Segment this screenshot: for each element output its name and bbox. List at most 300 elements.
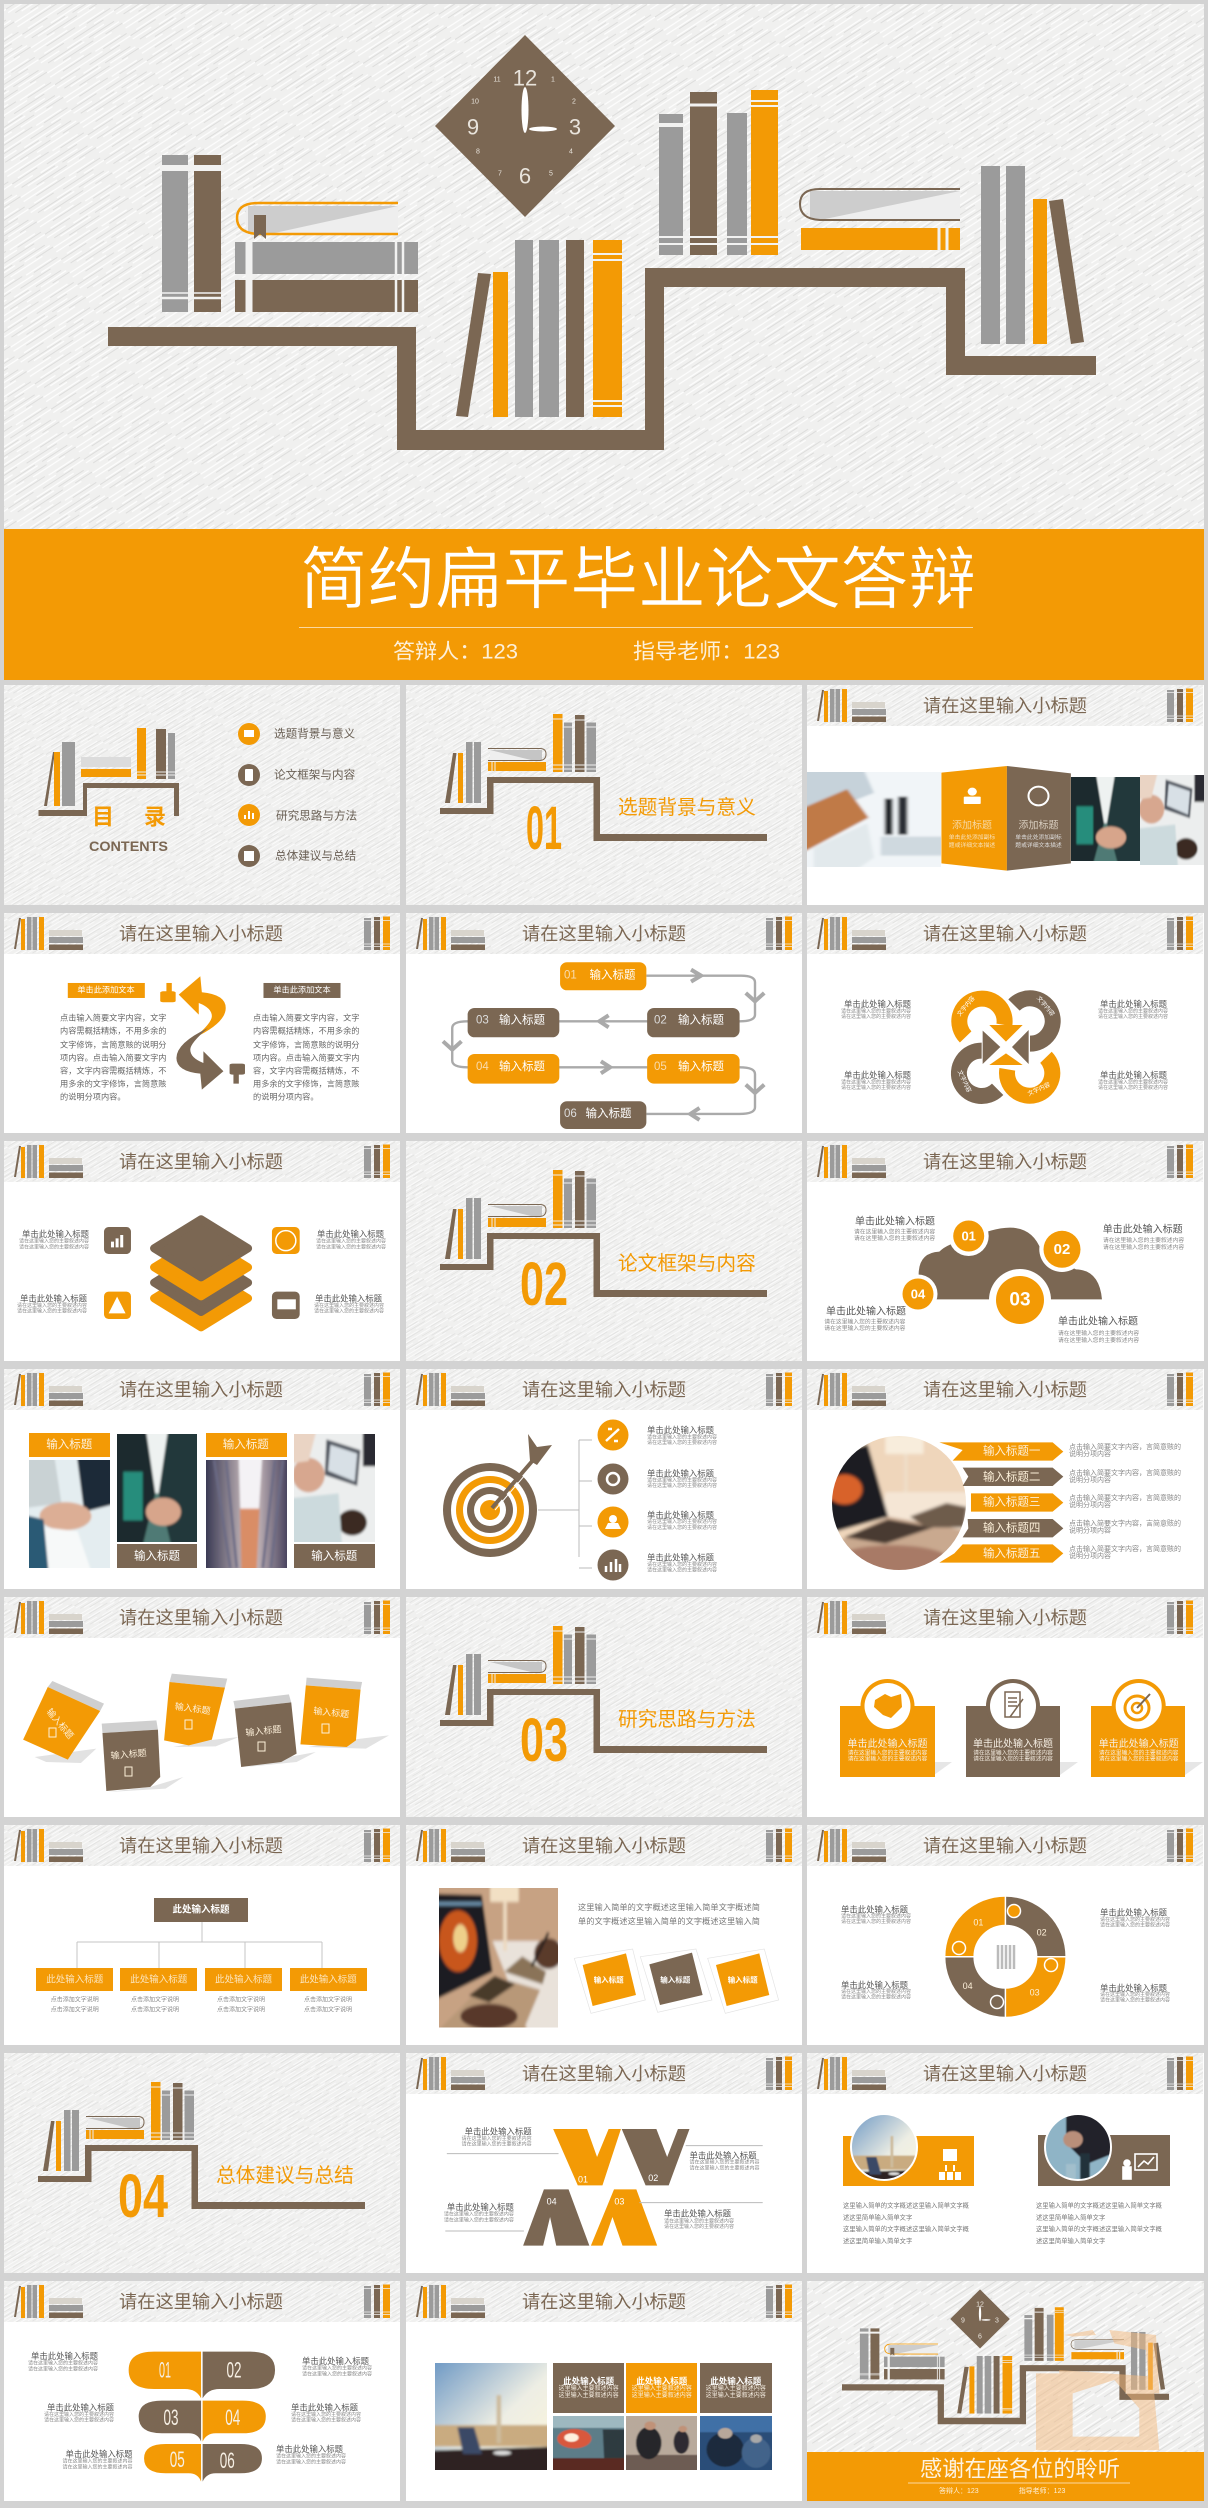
note shapes [23,1674,389,1792]
left photo [794,762,954,876]
text block B: 请在这里输入您的主要叙述内容 [690,2159,760,2166]
section number: 03 [520,1706,568,1774]
text block bottom right: 请在这里输入您的主要叙述内容 [1100,1997,1170,2004]
text block 01: 请在这里输入您的主要叙述内容 [854,1234,935,1242]
panel labels: 单击此处添加副标 [949,833,995,841]
text block R3 [276,2444,346,2465]
panel: flow slide [406,913,802,1133]
contents items: 总体建议与总结 [275,848,356,862]
slide title: 请在这里输入小标题 [522,2292,686,2312]
text block L3: 请在这里输入您的主要叙述内容 [62,2457,132,2464]
text block R1: 请在这里输入您的主要叙述内容 [302,2370,372,2377]
shelf icon [440,714,767,841]
column 3 [198,1433,295,1579]
text block L2: 单击此处输入标题 [47,2403,115,2413]
arrows and thumbs [68,976,341,1090]
note labels: 输入标题 [110,1747,147,1761]
bubbles [129,2352,275,2482]
flow labels: 输入标题 [499,1012,545,1026]
text block B: 请在这里输入您的主要叙述内容 [690,2164,760,2171]
panel: org chart slide [4,1825,400,2045]
clock numerals: 1 [551,76,555,84]
left paragraph: 文字修饰，言简意赅的说明分 [60,1040,166,1050]
slide title: 请在这里输入小标题 [923,1380,1087,1400]
tilted cards [574,1949,779,2013]
text block R2: 请在这里输入您的主要叙述内容 [291,2411,361,2418]
slide title: 请在这里输入小标题 [522,1836,686,1856]
text block C: 单击此处输入标题 [447,2202,515,2212]
text block top left [19,1229,90,1250]
presenter: 答辩人：123 [939,2486,979,2495]
text block top right: 请在这里输入您的主要叙述内容 [1098,1013,1168,1020]
slide title: 请在这里输入小标题 [119,1380,283,1400]
text block R2: 请在这里输入您的主要叙述内容 [291,2417,361,2424]
slide title: 请在这里输入小标题 [923,1836,1087,1856]
box 1: 此处输入标题 [563,2376,615,2386]
mini shelf illustration [842,2289,1169,2424]
clock numerals: 8 [476,148,480,156]
text block D: 单击此处输入标题 [664,2209,732,2219]
text block L1: 请在这里输入您的主要叙述内容 [28,2359,98,2366]
panel: photo grid slide [406,2281,802,2501]
column 3: 输入标题 [223,1437,269,1451]
text block R1 [302,2356,372,2377]
panel labels: 单击此处添加副标 [1015,833,1062,841]
text block bottom right [1100,1983,1170,2004]
text block 3 [647,1510,717,1531]
column 4 [286,1423,383,1568]
left paragraph: 的说明分项内容。 [60,1092,126,1102]
clock numerals: 2 [572,98,576,106]
text block R3: 请在这里输入您的主要叙述内容 [276,2458,346,2465]
header band [4,1369,400,1410]
right paragraph: 的说明分项内容。 [253,1092,319,1102]
text block L3 [62,2449,133,2470]
description text: 单的文字概述这里输入简单的文字概述这里输入简 [578,1916,760,1926]
note labels [45,1700,350,1761]
right paragraph: 内容需概括精炼，不用多余的 [253,1026,359,1036]
text block A: 单击此处输入标题 [465,2126,532,2136]
panel: section 01 [406,685,802,905]
text block L1: 单击此处输入标题 [31,2351,99,2361]
section number: 02 [520,1250,568,1318]
connector lines [538,1440,592,1568]
text block L1 [28,2351,99,2372]
descriptions: 点击输入简要文字内容，言简意赅的 [1069,1442,1181,1451]
right photo a [1064,769,1147,869]
tab labels: 输入标题五 [983,1546,1040,1560]
header band [4,1825,400,1866]
suit photo circle [1046,2115,1110,2179]
flow labels: 输入标题 [678,1059,724,1073]
text block A: 请在这里输入您的主要叙述内容 [462,2135,532,2142]
card 2 [966,1679,1078,1777]
text block C [444,2202,515,2223]
left paragraph: 述这里简单输入简单文字 [843,2236,912,2245]
small photo 3 [693,2411,779,2475]
text block bottom right: 请在这里输入您的主要叙述内容 [314,1308,384,1315]
text block top left: 单击此处输入标题 [22,1229,90,1239]
text block top right: 单击此处输入标题 [1100,1908,1168,1918]
text block L3: 单击此处输入标题 [66,2449,133,2459]
descriptions: 点击输入简要文字内容，言简意赅的 [1069,1518,1181,1528]
right paragraph: 用多余的文字修饰，言简意赅 [253,1078,359,1088]
photo [427,1874,570,2041]
numbered circles: 04 [911,1286,926,1302]
box 3: 此处输入标题 [710,2376,762,2386]
ribbon numbers: 02 [648,2173,658,2183]
text block 01 [854,1214,935,1242]
segment numbers [963,1917,1047,1998]
text block top left: 请在这里输入您的主要叙述内容 [841,1013,911,1020]
panel: photo with tilted cards slide [406,1825,802,2045]
text block top right: 请在这里输入您的主要叙述内容 [316,1238,386,1245]
tab labels: 输入标题二 [983,1469,1040,1483]
left paragraph: 内容需概括精炼，不用多余的 [60,1026,166,1036]
panel: speech bubble pairs slide [4,2281,400,2501]
box labels: 此处输入标题 [215,1974,272,1986]
text block D: 请在这里输入您的主要叙述内容 [664,2223,734,2230]
title underline [299,627,973,628]
bubble numbers: 02 [226,2358,242,2382]
box 1 [553,2363,624,2413]
card labels: 输入标题 [728,1974,758,1984]
text block C: 请在这里输入您的主要叙述内容 [444,2210,514,2217]
text block 02: 请在这里输入您的主要叙述内容 [1103,1236,1184,1244]
target with arrow [443,1434,552,1557]
text block top right [1098,999,1168,1020]
numbered circles: 02 [1054,1241,1070,1258]
left paragraph: 这里输入简单的文字概述这里输入简单文字概 [843,2200,970,2210]
clock numerals: 4 [569,148,573,156]
main title: 简约扁平毕业论文答辩 [300,542,976,618]
card 3 [1091,1679,1203,1777]
text block top left: 单击此处输入标题 [841,1904,909,1914]
segment numbers: 04 [963,1981,973,1991]
slide title: 请在这里输入小标题 [923,1608,1087,1628]
clock numerals: 10 [471,98,479,106]
text block C: 请在这里输入您的主要叙述内容 [444,2216,514,2223]
text block 2: 单击此处输入标题 [647,1468,715,1478]
descriptions: 点击输入简要文字内容，言简意赅的 [1069,1493,1181,1502]
section number: 01 [526,794,562,862]
text block bottom left [17,1293,88,1315]
panel: two circle photos slide [807,2053,1204,2273]
descriptions [1069,1442,1181,1560]
flow labels [476,968,724,1120]
text block top left: 请在这里输入您的主要叙述内容 [19,1238,89,1245]
section number: 04 [118,2162,168,2230]
note labels: 输入标题 [245,1723,282,1738]
text block top right [316,1229,386,1250]
small photo 1 [546,2411,631,2475]
box 2 [626,2363,697,2413]
card 1: 请在这里输入您的主要叙述内容 [848,1749,928,1757]
text block 4: 请在这里输入您的主要叙述内容 [647,1567,717,1574]
text block top left: 单击此处输入标题 [844,999,912,1009]
orange band [807,2452,1204,2501]
panel labels [949,818,1062,849]
sub captions: 点击添加文字说明 [217,1996,265,2004]
box 3: 这里输入主要叙述内容 [706,2391,766,2399]
descriptions: 点击输入简要文字内容，言简意赅的 [1069,1468,1181,1477]
panel labels: 题或详细文本描述 [949,841,995,849]
right paragraph: 容，文字内容需概括精炼，不 [253,1066,359,1076]
section title: 选题背景与意义 [618,797,756,819]
flow labels: 输入标题 [499,1059,545,1073]
panel: cloud slide [807,1141,1204,1361]
icon: presenter chart [1123,2154,1157,2179]
header band [4,913,400,954]
bubble numbers: 04 [225,2405,240,2430]
panel: section 03 [406,1597,802,1817]
sub captions: 点击添加文字说明 [131,1996,179,2004]
sub captions: 点击添加文字说明 [131,2006,179,2014]
text block L1: 请在这里输入您的主要叙述内容 [28,2365,98,2372]
header band [807,1141,1203,1182]
ribbon numbers: 03 [614,2197,624,2207]
box 2: 此处输入标题 [636,2376,688,2386]
box labels: 此处输入标题 [130,1974,188,1986]
text block top left: 请在这里输入您的主要叙述内容 [19,1243,89,1250]
peach ghost logo [1036,2330,1159,2450]
tab labels: 输入标题一 [983,1444,1041,1458]
text block bottom right: 请在这里输入您的主要叙述内容 [1098,1084,1168,1091]
left paragraph: 项内容。点击输入简要文字内 [60,1052,166,1062]
note labels: 输入标题 [174,1700,211,1716]
slide title: 请在这里输入小标题 [923,924,1087,944]
slide title: 请在这里输入小标题 [522,1380,686,1400]
text block 03: 请在这里输入您的主要叙述内容 [1058,1329,1139,1337]
right paragraph: 点击输入简要文字内容，文字 [253,1012,359,1022]
shelf icon [440,1626,767,1753]
flow labels: 02 [654,1014,667,1026]
descriptions: 点击输入简要文字内容，言简意赅的 [1069,1544,1181,1553]
right paragraph: 项内容。点击输入简要文字内 [253,1052,359,1062]
text block bottom right [314,1293,384,1315]
text block bottom right: 请在这里输入您的主要叙述内容 [314,1302,384,1309]
thank-you title: 感谢在座各位的聆听 [920,2456,1120,2482]
panel: section 02 [406,1141,802,1361]
bubble numbers: 06 [220,2448,235,2473]
section title: 研究思路与方法 [618,1709,756,1731]
sub captions [51,1996,352,2014]
box 1: 这里输入主要叙述内容 [559,2384,619,2392]
box labels: 此处输入标题 [46,1974,104,1986]
clock numerals [467,66,581,188]
text block L2: 请在这里输入您的主要叙述内容 [44,2417,114,2424]
flow labels: 04 [476,1061,489,1073]
text block 04 [824,1304,906,1332]
heading: mulu: 目 录 [92,804,166,830]
sub captions: 点击添加文字说明 [217,2006,265,2014]
text block bottom right [1098,1070,1168,1091]
left paragraph: 这里输入简单的文字概述这里输入简单文字概 [843,2224,970,2233]
text block bottom left: 请在这里输入您的主要叙述内容 [17,1308,87,1315]
text block 1: 单击此处输入标题 [647,1425,715,1435]
panel: section 04 [4,2053,400,2273]
right paragraph: 述这里简单输入简单文字 [1036,2212,1105,2222]
column 1 [21,1433,118,1579]
left paragraph: 述这里简单输入简单文字 [843,2212,912,2222]
slide title: 请在这里输入小标题 [522,924,686,944]
panel labels: 题或详细文本描述 [1015,841,1062,849]
text block 1 [647,1425,717,1446]
header band [807,913,1203,954]
text block 3: 请在这里输入您的主要叙述内容 [647,1524,717,1531]
header band [807,2053,1203,2094]
text block 04: 请在这里输入您的主要叙述内容 [824,1318,906,1326]
flow labels: 06 [564,1108,577,1120]
sub captions: 点击添加文字说明 [304,2006,352,2014]
text block 02: 单击此处输入标题 [1103,1222,1183,1236]
clock numerals: 12 [513,66,537,90]
text block bottom left [841,1980,911,2001]
text block top right: 请在这里输入您的主要叙述内容 [1100,1922,1170,1928]
mini clock numerals: 12 [976,2302,984,2308]
right paragraph: 述这里简单输入简单文字 [1036,2236,1105,2245]
sub captions: 点击添加文字说明 [304,1996,352,2004]
text block top left: 请在这里输入您的主要叙述内容 [841,1008,911,1014]
card 1: 单击此处输入标题 [848,1737,928,1750]
mini clock numerals: 9 [961,2318,965,2324]
header band [807,1369,1203,1410]
text block 03 [1058,1314,1139,1344]
ribbon numbers: 01 [578,2174,588,2184]
heading: contents: CONTENTS [89,839,168,854]
panel: target slide [406,1369,802,1589]
slide title: 请在这里输入小标题 [923,1152,1087,1172]
panel: sticky notes slide [4,1597,400,1817]
header band [406,2281,802,2322]
text block bottom left: 单击此处输入标题 [844,1070,912,1080]
slide title: 请在这里输入小标题 [522,2064,686,2084]
header band [406,1825,802,1866]
text block R1: 单击此处输入标题 [302,2356,370,2366]
column 2: 输入标题 [134,1549,180,1563]
box 1: 这里输入主要叙述内容 [559,2391,619,2399]
contents items [238,723,357,867]
card 1 [840,1679,952,1777]
text block bottom left [841,1070,912,1091]
right paragraph [1036,2200,1163,2245]
text block B: 单击此处输入标题 [690,2150,757,2160]
panel: puzzle ring slide [807,1825,1204,2045]
arrow tabs [939,1442,1063,1563]
cloud shape [919,1228,1102,1299]
mini clock numerals: 6 [978,2334,982,2340]
text block bottom left: 请在这里输入您的主要叙述内容 [841,1078,911,1086]
contents items: 选题背景与意义 [274,726,356,740]
numbered circles [898,1216,1085,1331]
text block 03: 请在这里输入您的主要叙述内容 [1058,1336,1139,1344]
card 1: 请在这里输入您的主要叙述内容 [848,1755,928,1763]
lower boxes [36,1968,367,1991]
circle ring b [1045,2114,1111,2180]
layer stack and icon tiles [104,1219,300,1327]
note labels: 输入标题 [45,1706,76,1741]
ribbon numbers: 04 [547,2197,557,2207]
description text: 这里输入简单的文字概述这里输入简单文字概述简 [578,1902,760,1912]
text block bottom left: 单击此处输入标题 [841,1980,909,1990]
clock numerals: 3 [569,114,581,140]
panel: clover slide [807,913,1204,1133]
text block L3: 请在这里输入您的主要叙述内容 [62,2463,132,2470]
sub captions: 点击添加文字说明 [51,1996,99,2004]
text block D: 请在这里输入您的主要叙述内容 [664,2217,734,2224]
text block bottom left: 请在这里输入您的主要叙述内容 [17,1302,87,1309]
card 3: 单击此处输入标题 [1099,1737,1179,1750]
circle ring a [851,2114,917,2180]
center icon [998,1945,1014,1969]
slide title: 请在这里输入小标题 [119,2292,283,2312]
box labels: 此处输入标题 [300,1974,357,1986]
column 1: 输入标题 [46,1437,93,1451]
mini clock numerals: 3 [995,2318,999,2324]
text block R3: 单击此处输入标题 [276,2444,344,2454]
text block 01: 请在这里输入您的主要叙述内容 [854,1228,935,1236]
segment numbers: 02 [1037,1928,1047,1938]
slide title: 请在这里输入小标题 [923,696,1087,716]
text block 02 [1103,1222,1184,1251]
text block top right: 单击此处输入标题 [317,1229,385,1239]
clover diagram: 文字内容 [956,1069,973,1094]
flow connectors and boxes [443,962,764,1129]
card labels: 输入标题 [660,1974,691,1984]
icon: org tree [939,2149,961,2180]
sub captions: 点击添加文字说明 [51,2006,99,2014]
text block 3: 单击此处输入标题 [647,1510,715,1520]
text block L2 [44,2403,115,2424]
text block top left: 请在这里输入您的主要叙述内容 [841,1918,911,1925]
panel: V shapes slide [406,2053,802,2273]
box 3: 这里输入主要叙述内容 [706,2384,766,2392]
text block bottom right: 请在这里输入您的主要叙述内容 [1098,1078,1168,1086]
flow labels: 输入标题 [586,1106,632,1120]
text block bottom left: 请在这里输入您的主要叙述内容 [841,1994,911,2001]
left paragraph: 容，文字内容需概括精炼，不 [60,1066,166,1076]
shelf icon [38,2082,365,2209]
band line [908,2482,1130,2484]
description text [578,1902,760,1926]
text block bottom right: 单击此处输入标题 [1100,1983,1168,1993]
slide title: 请在这里输入小标题 [119,1836,283,1856]
slide title: 请在这里输入小标题 [119,924,283,944]
text block bottom left: 请在这里输入您的主要叙述内容 [841,1084,911,1091]
tab labels [983,1444,1041,1560]
text block R3: 请在这里输入您的主要叙述内容 [276,2453,346,2460]
segment numbers: 01 [973,1917,983,1927]
text block top right: 请在这里输入您的主要叙述内容 [1098,1008,1168,1014]
clock numerals: 9 [467,114,479,140]
text block bottom left: 请在这里输入您的主要叙述内容 [841,1988,911,1995]
left paragraph: 用多余的文字修饰，言简意赅 [60,1078,166,1088]
segment numbers: 03 [1030,1988,1040,1998]
panel: thank you slide [807,2281,1204,2501]
panel labels: 添加标题 [1018,818,1058,832]
text block L2: 请在这里输入您的主要叙述内容 [44,2411,114,2418]
panel: two arrows slide [4,913,400,1133]
text block bottom left: 单击此处输入标题 [20,1293,88,1303]
panel: contents slide [4,685,400,905]
numbered circles: 01 [961,1228,976,1244]
text block 2 [647,1468,717,1489]
clock numerals: 5 [549,170,553,178]
text block 01: 单击此处输入标题 [855,1214,935,1228]
card 3: 请在这里输入您的主要叙述内容 [1099,1755,1179,1763]
small photo 2 [619,2411,704,2475]
text block 2: 请在这里输入您的主要叙述内容 [647,1482,717,1489]
